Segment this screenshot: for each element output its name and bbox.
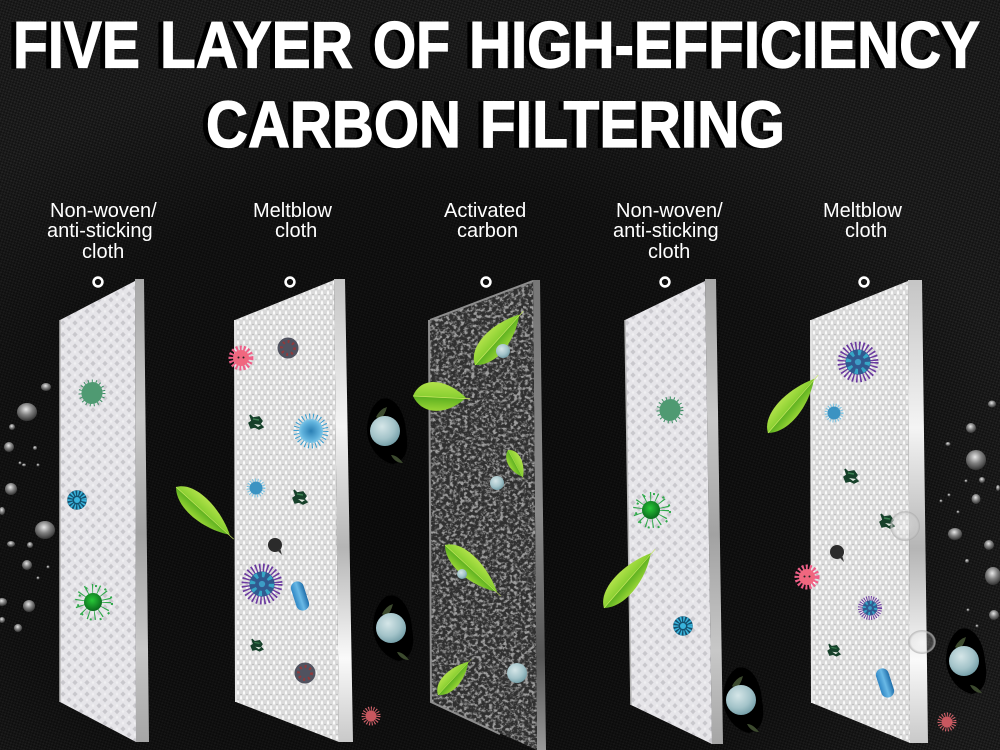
- leaf: on carbon bottom: [432, 653, 477, 701]
- panel: layer 2 meltblow cloth: [231, 279, 353, 742]
- title: FIVE: [13, 9, 140, 82]
- blob with ball: right: [946, 628, 986, 694]
- label: layer 5: [823, 200, 902, 242]
- ball: pollutant: [457, 569, 467, 579]
- ball: pollutant: [507, 663, 527, 683]
- panel: layer 1 non-woven cloth: [60, 279, 149, 742]
- label: layer 3: carbon: [457, 220, 518, 242]
- virus: pink: [797, 567, 817, 587]
- leaf: broad: [413, 381, 471, 412]
- leaf: small: [502, 446, 531, 483]
- label: layer 1: anti-sticking: [47, 220, 153, 242]
- virus: small blue: [826, 405, 842, 421]
- label: layer 2: [253, 200, 332, 242]
- droplet: large on edge: [908, 630, 936, 654]
- title: OF: [368, 9, 445, 82]
- label: layer 1: [47, 200, 157, 263]
- ball: pollutant: [490, 476, 504, 490]
- label: layer 3: Activated: [444, 200, 526, 222]
- virus: salmon: [364, 708, 378, 724]
- virus: blue: [296, 416, 326, 446]
- leaf: on carbon top: [466, 302, 532, 373]
- droplets: right spray: [940, 400, 1000, 628]
- virus: purple spiked: [842, 346, 874, 378]
- virus: purple spiked small: [861, 599, 879, 617]
- blob with ball: bottom: [723, 667, 763, 733]
- droplet: large on edge: [890, 511, 920, 541]
- blob with ball: upper: [367, 398, 407, 464]
- panel: layer 3 activated carbon: [425, 275, 546, 750]
- droplets: left spray: [0, 383, 55, 632]
- label: layer 5: Meltblow: [823, 200, 902, 222]
- virus: blue sphere: [673, 616, 693, 636]
- ball: pollutant: [496, 344, 510, 358]
- virus: dark red sphere: [294, 662, 316, 684]
- title: FIVE: [8, 9, 135, 82]
- blob with ball: lower: [373, 595, 413, 661]
- bacterium: blue capsule: [874, 667, 896, 699]
- label: layer 4: Non-woven/: [616, 200, 723, 222]
- virus: green blob: [78, 379, 106, 407]
- bacterium: green: [828, 644, 840, 656]
- bacterium: green: [251, 639, 263, 651]
- particle: black: [268, 538, 282, 555]
- title: [8, 9, 980, 161]
- panel: layer 4 non-woven cloth: [625, 279, 723, 744]
- title: LAYER: [160, 9, 353, 82]
- bacterium: green: [293, 490, 307, 504]
- leaf: crossing layer 5: [759, 367, 826, 440]
- title: CARBON: [201, 88, 456, 162]
- label: layer 4: anti-sticking: [613, 220, 719, 242]
- label: layer 1: cloth: [82, 241, 124, 263]
- title: OF: [373, 9, 450, 82]
- leaf: between layers 1 and 2: [169, 478, 242, 547]
- bacterium: green: [880, 514, 894, 528]
- label: layer 5: cloth: [845, 220, 887, 242]
- leaf: on carbon lower: [438, 537, 509, 604]
- bacterium: green: [249, 415, 263, 429]
- virus: green spiky: [636, 494, 670, 528]
- label: layer 3: [444, 200, 526, 242]
- label: layer 1: Non-woven/: [50, 200, 157, 222]
- virus: dark red sphere: [278, 338, 298, 358]
- virus: green blob: [656, 396, 684, 424]
- panel: layer 5 meltblow cloth: [811, 280, 928, 743]
- title: LAYER: [155, 9, 348, 82]
- label: layer 4: cloth: [648, 241, 690, 263]
- bacterium: green: [844, 469, 858, 483]
- leaf: crossing layer 4: [595, 541, 663, 615]
- title: FILTERING: [475, 88, 780, 162]
- label: layer 2: cloth: [275, 220, 317, 242]
- title: FILTERING: [480, 88, 785, 161]
- particle: black: [830, 545, 844, 562]
- title: CARBON: [206, 88, 461, 161]
- virus: salmon: [940, 714, 954, 730]
- virus: blue sphere: [67, 490, 87, 510]
- markers: ring points above layers: [94, 278, 868, 286]
- label: layer 2: Meltblow: [253, 200, 332, 222]
- virus: small blue: [248, 480, 264, 496]
- bacterium: blue capsule: [289, 580, 311, 612]
- virus: green spiky: [78, 586, 112, 620]
- label: layer 4: [613, 200, 723, 263]
- virus: purple spiked: [246, 568, 278, 600]
- virus: pink: [231, 348, 251, 368]
